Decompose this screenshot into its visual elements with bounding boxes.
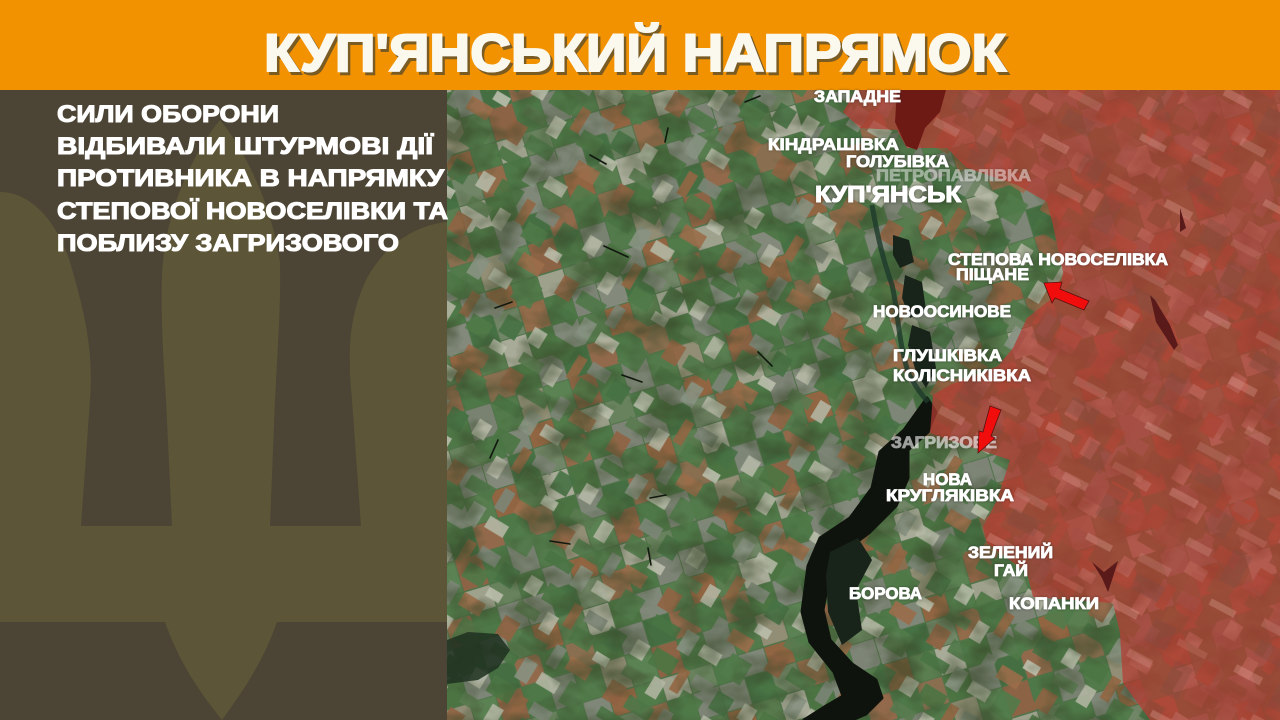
panel: left text background with trident	[0, 90, 447, 720]
arrow: toward Zahryzove	[978, 406, 1001, 453]
river: Oskil water and forests	[802, 205, 936, 720]
map labels: settlements: БОРОВА	[849, 585, 922, 603]
map labels: settlements: ГОЛУБІВКА	[846, 153, 949, 171]
map labels: settlements: СТЕПОВА НОВОСЕЛІВКА	[948, 251, 1168, 269]
text block: summary: СТЕПОВОЇ НОВОСЕЛІВКИ ТА	[57, 198, 448, 225]
forest near the south-west edge	[447, 632, 510, 684]
title: КУП'ЯНСЬКИЙ НАПРЯМОК	[264, 22, 1007, 83]
arrow: toward Stepova Novoselivka	[1044, 282, 1089, 310]
text block: summary: ВІДБИВАЛИ ШТУРМОВІ ДІЇ	[57, 133, 435, 160]
title bar	[0, 0, 1280, 90]
map labels: settlements: КОЛІСНИКІВКА	[893, 367, 1031, 385]
map labels: settlements: КРУГЛЯКІВКА	[886, 487, 1014, 505]
text block: summary	[57, 101, 448, 257]
map labels: settlements: НОВА	[923, 471, 972, 489]
map labels: settlements	[768, 88, 1168, 613]
occupied territory: red overlay	[843, 90, 1280, 720]
map labels: settlements: ГЛУШКІВКА	[893, 347, 1002, 365]
map labels: settlements: КОПАНКИ	[1009, 595, 1099, 613]
map labels: settlements: ЗАПАДНЕ	[814, 88, 901, 106]
map labels: settlements: КІНДРАШІВКА	[768, 136, 899, 154]
map labels: settlements: ЗЕЛЕНИЙ	[968, 543, 1053, 562]
text block: summary: ПРОТИВНИКА В НАПРЯМКУ	[57, 165, 445, 192]
text block: summary: СИЛИ ОБОРОНИ	[57, 101, 279, 128]
text block: summary: ПОБЛИЗУ ЗАГРИЗОВОГО	[57, 230, 399, 257]
satellite map	[447, 90, 1280, 720]
map labels: settlements: ГАЙ	[994, 561, 1028, 580]
map labels: settlements: КУП'ЯНСЬК	[815, 181, 962, 207]
icon: trident emblem	[0, 120, 447, 720]
map labels: settlements: НОВООСИНОВЕ	[873, 303, 1011, 321]
map labels: settlements: ЗАГРИЗОВЕ	[891, 434, 997, 452]
map labels: settlements: ПІЩАНЕ	[956, 266, 1029, 284]
map labels: settlements: ПЕТРОПАВЛІВКА	[876, 167, 1031, 185]
